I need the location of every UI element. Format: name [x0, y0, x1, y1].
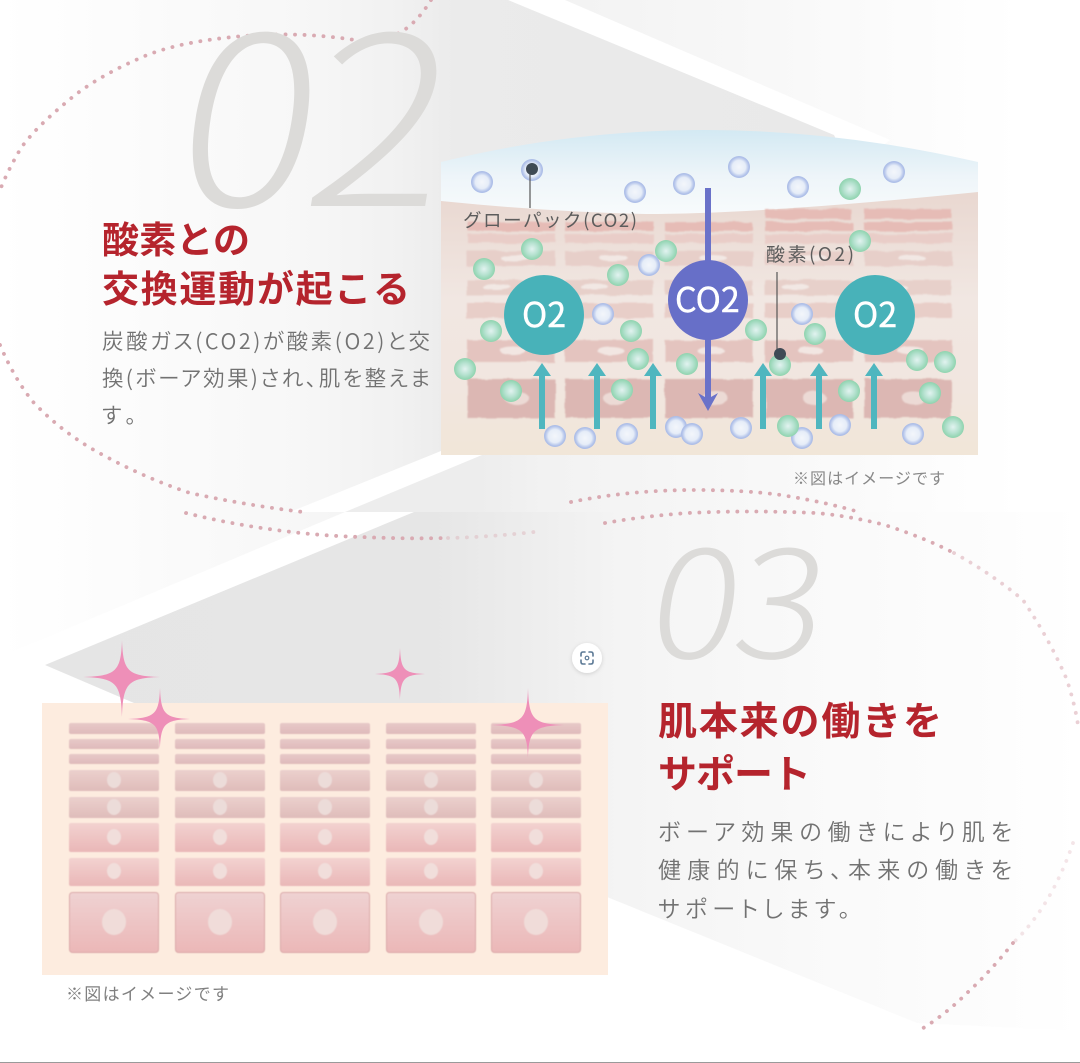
sparkles [83, 640, 564, 758]
heading: 酸素との交換運動が起こる: 交換運動が起こる [102, 259, 410, 313]
body text: bottom section: サポートします。 [658, 890, 850, 924]
callout: グローパック(CO2): グローパック(CO2) [463, 207, 637, 233]
heading: 酸素との交換運動が起こる: 酸素との [102, 210, 250, 264]
number 03: 03 [637, 485, 840, 701]
circle: O2 right [835, 275, 915, 355]
body text: top section: 炭酸ガス(CO2)が酸素(O2)と交 [102, 325, 430, 356]
body text: bottom section: ボーア効果の働きにより肌を [658, 813, 1012, 847]
heading: 肌本来の働きをサポート: サポート [658, 744, 811, 800]
heading: 肌本来の働きをサポート [658, 691, 942, 800]
skin cell layers [467, 209, 952, 418]
callout: 酸素(O2): 酸素(O2) [766, 240, 854, 267]
circle: O2 left [504, 275, 584, 355]
icon: image scan button [572, 643, 602, 673]
arrow: CO2 descending [698, 188, 718, 411]
circle: CO2: CO2 [675, 273, 740, 322]
body text: top section [102, 325, 430, 430]
bubbles: CO2 [471, 156, 924, 449]
panel: skin diagram with CO2 and O2 exchange [441, 130, 978, 455]
bubbles: oxygen [454, 178, 964, 438]
skin background [441, 130, 978, 455]
panel background [42, 703, 608, 975]
body text: top section: す。 [102, 399, 136, 430]
circle: CO2 [668, 260, 748, 340]
circle: O2 left: O2 [522, 288, 566, 337]
callout: 酸素(O2) [766, 240, 854, 360]
callout: グローパック(CO2) [463, 163, 637, 233]
note: bottom figure: ※図はイメージです [66, 980, 229, 1005]
note: top figure: ※図はイメージです [793, 465, 945, 489]
cell columns [69, 723, 581, 952]
arrows: oxygen rising [533, 363, 883, 429]
body text: bottom section [658, 813, 1012, 924]
heading: 酸素との交換運動が起こる [102, 210, 410, 313]
circle: O2 right: O2 [853, 288, 897, 337]
body text: bottom section: 健康的に保ち、本来の働きを [658, 851, 1012, 885]
panel: healthy skin cells [42, 640, 608, 975]
body text: top section: 換(ボーア効果)され、肌を整えま [102, 362, 430, 393]
heading: 肌本来の働きをサポート: 肌本来の働きを [658, 691, 942, 747]
